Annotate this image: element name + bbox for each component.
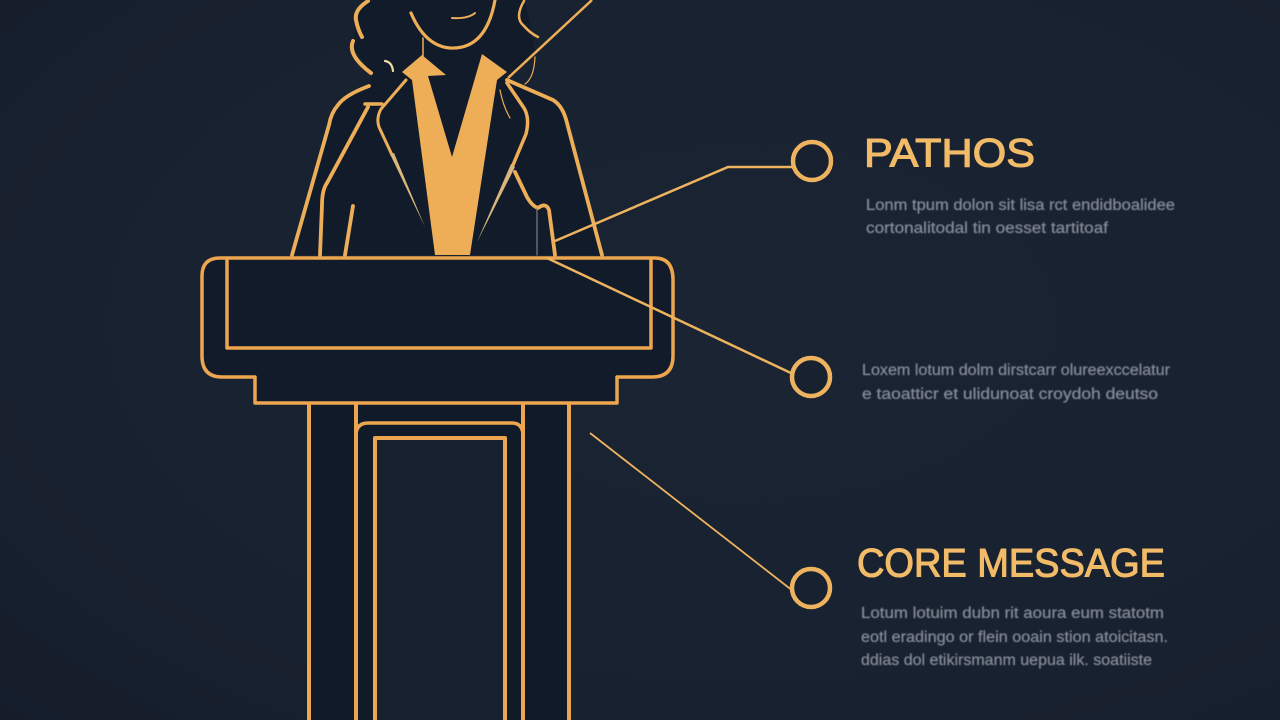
connector: logos [547,258,830,396]
logos body text: e taoatticr et ulidunoat croydoh deutso [862,386,1158,403]
right lapel taper [477,164,515,242]
left lapel taper [390,153,425,227]
thin finger line [536,208,538,255]
core message body text [861,605,1168,669]
core message body text: Lotum lotuim dubn rit aoura eum statotm [861,605,1164,622]
logos line [547,258,793,374]
logos body text: Loxem lotum dolm dirstcarr olureexccelatur [862,362,1170,379]
collar tick [365,102,382,106]
speaker figure [292,0,602,255]
connector: core message [590,433,830,607]
left hair curls [352,1,371,73]
podium [202,258,673,720]
pathos body text: Lonm tpum dolon sit lisa rct endidboalidee [866,197,1175,214]
pathos heading: PATHOS [864,132,1035,176]
connector: top line [508,0,592,78]
pathos node [793,142,831,180]
inner door panel [375,438,505,720]
logos node [792,358,830,396]
arched inner frame [356,423,523,434]
column outer lines [309,403,569,720]
column fill [309,403,569,720]
neck line [422,38,424,56]
right shoulder [507,80,602,255]
core message heading: CORE MESSAGE [857,542,1165,586]
pathos body text: cortonalitodal tin oesset tartitoaf [866,220,1109,237]
connector: pathos [555,142,831,241]
podium inner panel [227,258,651,348]
core message body text: ddias dol etikirsmanm uepua ilk. soatiiste [861,652,1152,669]
face chin [411,0,495,48]
thin collar details [500,57,535,118]
logos body text [862,362,1170,403]
silhouette fill [292,0,602,255]
earring [385,61,393,71]
right hair curl [519,1,538,37]
left hand line [345,206,353,255]
right arm and hand [515,172,555,255]
core message line [590,433,793,591]
core message node [792,569,830,607]
right lapel [507,83,528,165]
mouth [452,13,475,18]
pathos line [555,167,794,241]
pathos body text [866,197,1175,237]
shirt V [402,54,507,255]
podium top [202,258,673,403]
left inner arm [320,107,368,255]
left shoulder [292,86,369,255]
left lapel [378,80,406,155]
centre panel fill [375,438,505,720]
core message body text: eotl eradingo or flein ooain stion atoicitasn. [861,629,1168,646]
